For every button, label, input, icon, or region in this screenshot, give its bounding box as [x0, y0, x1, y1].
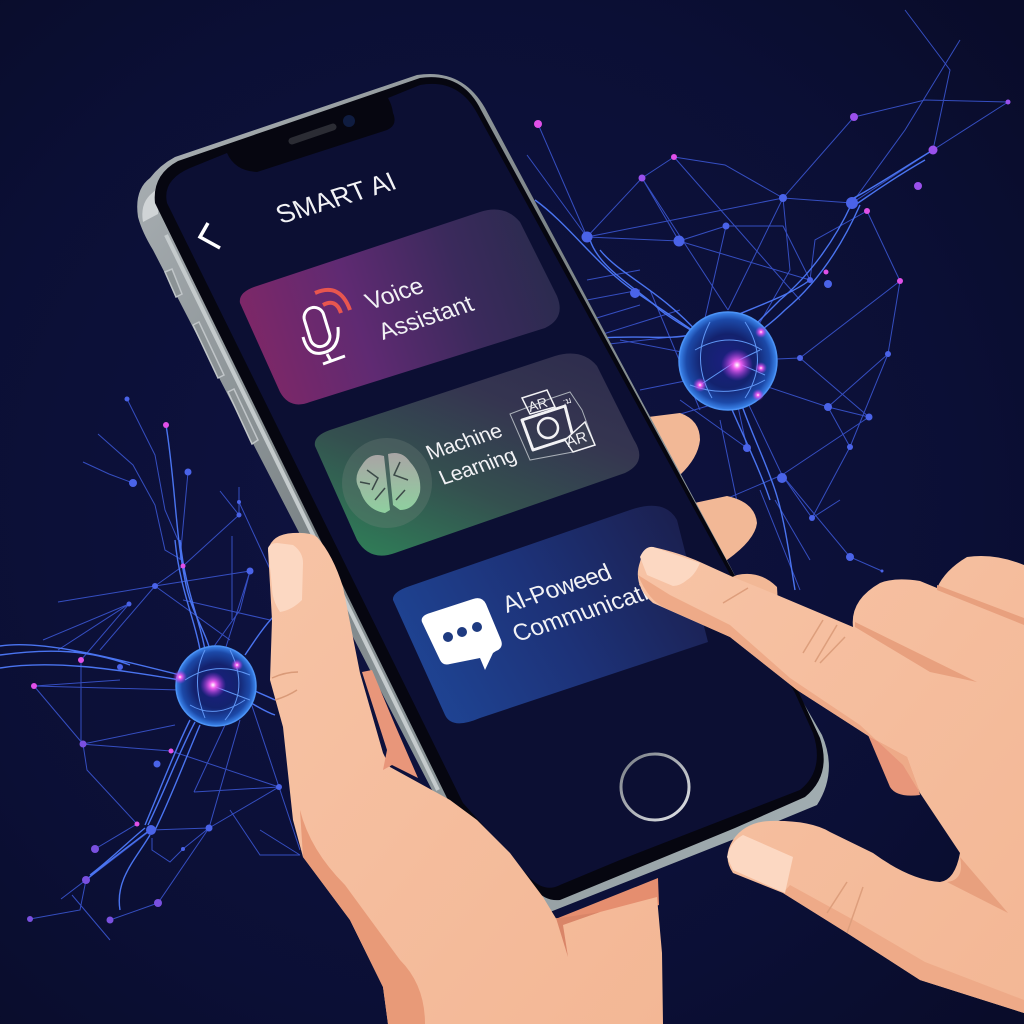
left hand holding phone [268, 533, 663, 1024]
network nodes [117, 396, 282, 851]
index finger, palm and thumb [638, 547, 1024, 1013]
palm crease [556, 912, 600, 957]
orb: lower left [173, 646, 256, 726]
phone bezel [155, 77, 824, 900]
phone [137, 74, 829, 912]
orb: upper right [679, 312, 777, 410]
card: machine learning: Learning [435, 444, 520, 490]
phone frame [137, 74, 829, 912]
icon: signal arcs [315, 290, 350, 313]
card: machine learning [315, 354, 639, 556]
thumb and palm [268, 533, 663, 1024]
frame highlight [166, 235, 438, 790]
web fold [947, 857, 1008, 913]
camera [343, 115, 355, 127]
icon: AR camera: AR [526, 394, 549, 415]
neural network: lower left [0, 396, 300, 940]
thumb edge shadow [783, 885, 1024, 1013]
thumb creases [272, 672, 298, 700]
back fingers behind phone [640, 413, 757, 570]
card: AI-powered communication [393, 506, 708, 723]
web shadow [362, 670, 418, 778]
icon: microphone [302, 305, 345, 364]
back arrow [200, 223, 220, 248]
card: voice assistant: Assistant [374, 291, 478, 345]
right hand pointing [638, 547, 1024, 1013]
text: machine learning: Machine [422, 419, 506, 465]
thumb nail [268, 543, 303, 612]
index fingernail [640, 547, 700, 586]
palm shadow under phone [553, 878, 659, 935]
icon: AR camera: :ม [562, 395, 573, 407]
text: voice assistant: Voice [361, 273, 428, 315]
speaker [292, 127, 333, 141]
middle knuckle [730, 574, 778, 605]
text: AI-powered communication: AI-Poweed [498, 559, 616, 618]
home button [621, 754, 689, 820]
icon: AR camera [510, 390, 595, 460]
knuckle folds [855, 585, 1024, 682]
thumb nail [727, 835, 793, 893]
neural network: upper right [527, 10, 1010, 590]
hand edge shadow [300, 810, 425, 1024]
icon: chat bubble [422, 598, 502, 670]
icon: AR camera: AR [564, 428, 589, 451]
finger creases [723, 588, 863, 933]
icon: brain [342, 438, 432, 528]
index edge shadow [638, 575, 920, 793]
card: voice assistant [240, 210, 560, 404]
card: AI-powered communication: Communication [508, 571, 678, 647]
phone screen [166, 84, 817, 888]
network nodes [582, 194, 891, 572]
side buttons [165, 269, 258, 444]
title: SMART AI [271, 166, 401, 229]
curled ring finger [868, 735, 920, 796]
